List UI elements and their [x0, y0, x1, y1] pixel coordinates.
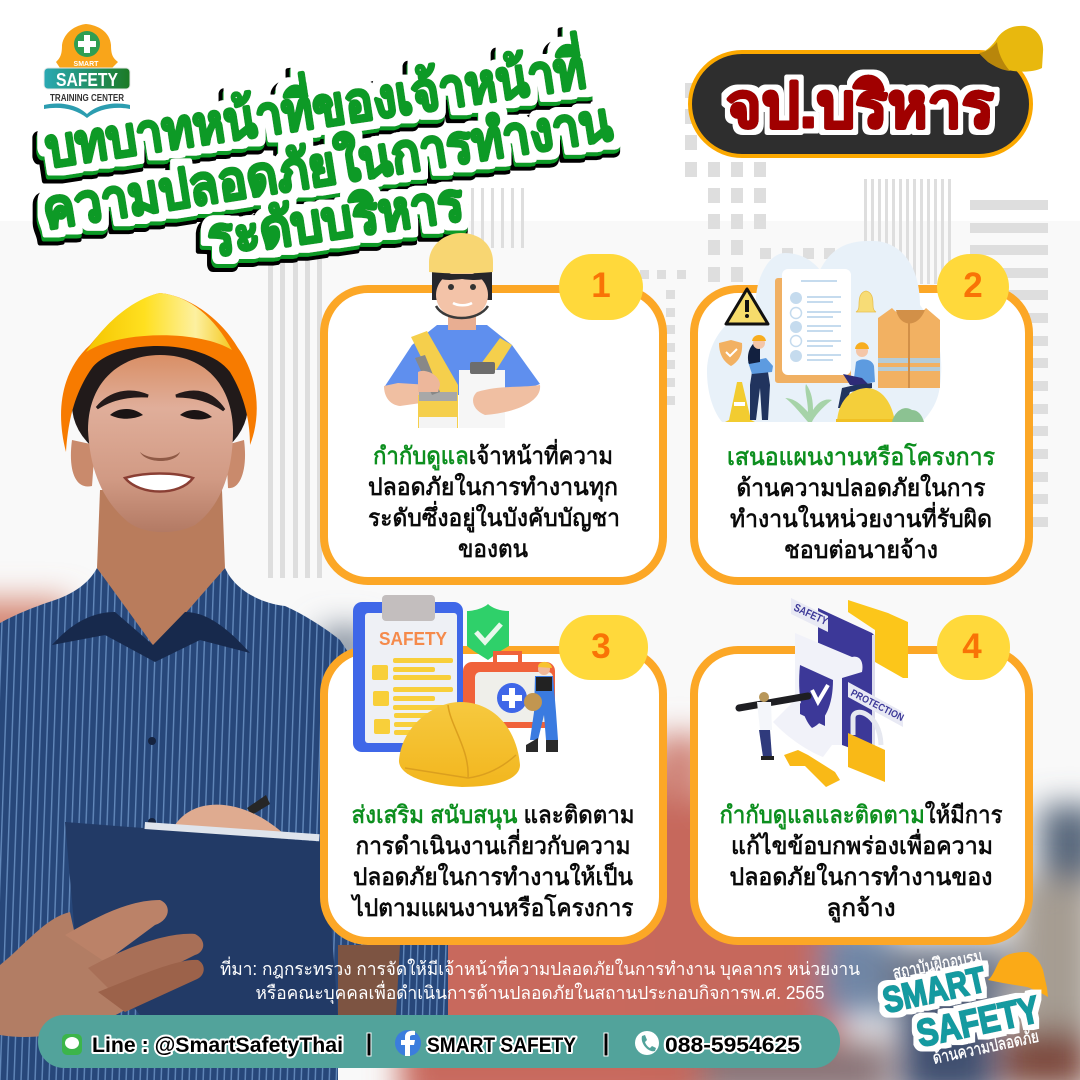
- card 4 text: ปลอดภัยในการทำงานของ: [730, 863, 992, 891]
- illustration: safety checklist and helmet: SAFETY: [379, 629, 447, 649]
- icon: facebook: [395, 1030, 421, 1056]
- card 3 text: ส่งเสริม สนับสนุน และติดตาม: [352, 802, 634, 830]
- hard hat: [61, 293, 257, 452]
- title line 2: ความปลอดภัยในการทำงาน: [38, 90, 616, 241]
- icon: phone: [635, 1031, 659, 1055]
- holding hand: [0, 900, 204, 1037]
- number badge 3: 3: [591, 627, 611, 666]
- source note: หรือคณะบุคคลเพื่อดำเนินการด้านปลอดภัยในสถานประกอบกิจการพ.ศ. 2565: [256, 980, 824, 1004]
- source note: ที่มา: กฎกระทรวง การจัดให้มีเจ้าหน้าที่ความปลอดภัยในการทำงาน บุคลากร หน่วยงาน: [220, 956, 860, 980]
- clipboard: [65, 822, 338, 1015]
- card 2 text: เสนอแผนงานหรือโครงการ: [727, 443, 995, 471]
- card 1 text: [368, 439, 620, 563]
- line account: Line : @SmartSafetyThai: [92, 1034, 343, 1057]
- separator: [604, 1033, 608, 1056]
- card 4 text: [720, 801, 1003, 923]
- SMART and SAFETY wordmark: [879, 958, 1043, 1056]
- illustration: safety protection document: SAFETY: [792, 602, 830, 628]
- illustration: safety checklist and helmet: [353, 595, 558, 787]
- card 4 text: แก้ไขข้อบกพร่องเพื่อความ: [731, 829, 993, 860]
- icon: line: [62, 1034, 82, 1055]
- title line 1: บทบาทหน้าที่ของเจ้าหน้าที่: [40, 30, 589, 179]
- title line 3: ระดับบริหาร: [203, 172, 467, 268]
- number badge 4: 4: [962, 627, 982, 666]
- logo: Smart Safety Training Center: SAFETY: [56, 70, 118, 90]
- card 1 text: ปลอดภัยในการทำงานทุก: [368, 473, 618, 502]
- card 1 text: กำกับดูแลเจ้าหน้าที่ความ: [373, 439, 613, 471]
- SAFETY: SAFETY: [913, 989, 1043, 1056]
- panel: card 4: [694, 598, 1029, 941]
- panel: card 3: [324, 595, 663, 941]
- logo: Smart Safety Training Center: SMART: [74, 61, 99, 68]
- separator: [367, 1033, 371, 1056]
- institute line: สถาบันฝึกอบรม: [891, 946, 984, 983]
- writing hand and pen: [145, 795, 320, 841]
- face: [88, 355, 233, 532]
- card 2 text: ด้านความปลอดภัยในการ: [736, 474, 986, 502]
- card 4 text: ลูกจ้าง: [826, 895, 896, 923]
- panel: card 2: [694, 241, 1029, 581]
- illustration: safety plan team: [707, 241, 941, 422]
- number badge 3: [559, 615, 648, 680]
- collar shadow: [52, 612, 250, 662]
- logo: Smart Safety institute: [879, 946, 1048, 1068]
- logo: Smart Safety Training Center: [44, 24, 130, 118]
- ears: [71, 440, 245, 488]
- card 4 text: กำกับดูแลและติดตามให้มีการ: [720, 801, 1003, 830]
- illustration: safety protection document: [739, 598, 908, 787]
- icon: hard hat on badge: [979, 26, 1043, 72]
- forearm: [338, 945, 400, 1015]
- card 2 text: ทำงานในหน่วยงานที่รับผิด: [730, 502, 992, 533]
- card 2 text: ชอบต่อนายจ้าง: [784, 537, 938, 564]
- number badge 2: 2: [963, 266, 983, 305]
- facebook name: SMART SAFETY: [427, 1034, 576, 1057]
- card 2 text: [727, 443, 995, 564]
- badge heading: จป.บริหาร: [726, 72, 994, 141]
- icon: logo hard hat: [988, 952, 1048, 997]
- number badge 2: [937, 254, 1009, 320]
- illustration: worker: [384, 233, 540, 428]
- card 3 text: ไปตามแผนงานหรือโครงการ: [351, 894, 634, 922]
- role badge: [690, 26, 1043, 156]
- panel: card 1: [324, 233, 663, 581]
- neck: [97, 490, 225, 648]
- card 1 text: ของตน: [458, 536, 528, 563]
- shirt: [0, 568, 448, 1080]
- logo: Smart Safety Training Center: TRAINING CENTER: [50, 93, 125, 104]
- illustration: safety protection document: PROTECTION: [849, 688, 905, 724]
- card 1 text: ระดับซึ่งอยู่ในบังคับบัญชา: [368, 501, 620, 533]
- number badge 1: 1: [591, 266, 611, 305]
- card 3 text: [351, 802, 634, 922]
- title: [38, 30, 616, 268]
- contact bar: [38, 1015, 840, 1068]
- number badge 1: [559, 254, 643, 320]
- hair and hat interior: [72, 339, 248, 471]
- card 3 text: ปลอดภัยในการทำงานให้เป็น: [353, 862, 633, 891]
- tagline: ด้านความปลอดภัย: [931, 1027, 1040, 1068]
- SMART: SMART: [879, 958, 989, 1021]
- card 3 text: การดำเนินงานเกี่ยวกับความ: [356, 829, 630, 860]
- source note: [220, 956, 860, 1004]
- number badge 4: [937, 615, 1010, 680]
- shirt buttons: [148, 737, 156, 826]
- photo: smiling engineer with clipboard: [0, 293, 448, 1080]
- facial features: [97, 392, 224, 492]
- phone number: 088-5954625: [665, 1034, 800, 1057]
